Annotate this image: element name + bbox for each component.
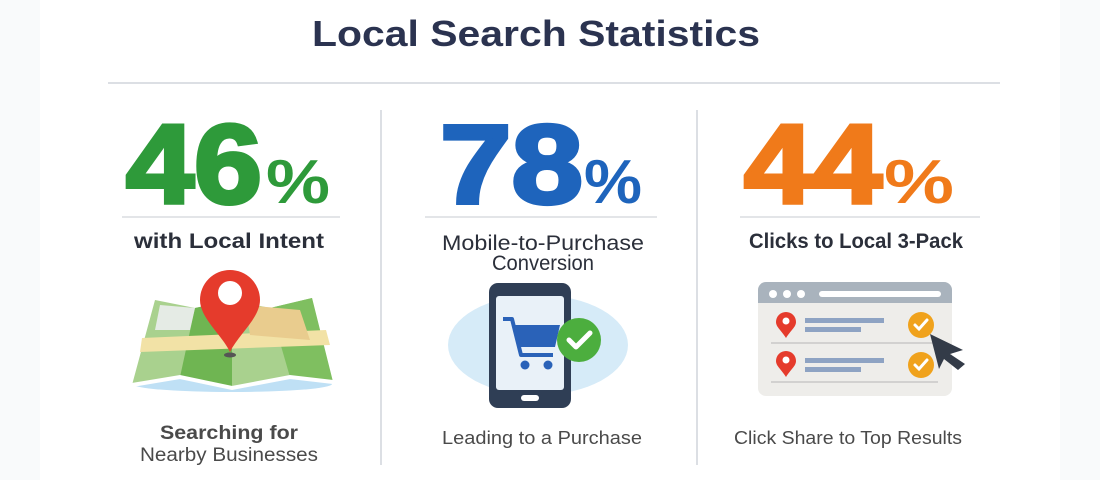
label: leading to purchase: Leading to a Purchase bbox=[442, 428, 642, 448]
panel: local intent: % bbox=[266, 148, 330, 217]
stat: 44%: 44 bbox=[744, 102, 882, 227]
icon: browser results bbox=[758, 282, 965, 396]
icon: map with pin bbox=[132, 270, 333, 392]
panel: local intent bbox=[122, 102, 340, 466]
panel: mobile conversion: % bbox=[584, 148, 642, 217]
panel: mobile conversion bbox=[425, 102, 657, 448]
panel: local 3-pack: % bbox=[884, 148, 954, 217]
label: clicks to 3-pack: Clicks to Local 3-Pack bbox=[749, 230, 963, 253]
panel: mobile conversion: Conversion bbox=[492, 252, 594, 275]
icon: phone with cart bbox=[448, 283, 628, 408]
panel: local intent: Nearby Businesses bbox=[140, 445, 318, 466]
stat: 78%: 78 bbox=[440, 102, 583, 227]
title: Local Search Statistics bbox=[312, 13, 760, 54]
label: searching: Searching for bbox=[160, 423, 299, 444]
panel: local 3-pack bbox=[734, 102, 980, 448]
stat: 46%: 46 bbox=[126, 102, 262, 227]
label: with Local Intent: with Local Intent bbox=[133, 230, 324, 253]
label: click share: Click Share to Top Results bbox=[734, 428, 962, 448]
label: mobile-to-purchase: Mobile-to-Purchase bbox=[442, 232, 644, 255]
